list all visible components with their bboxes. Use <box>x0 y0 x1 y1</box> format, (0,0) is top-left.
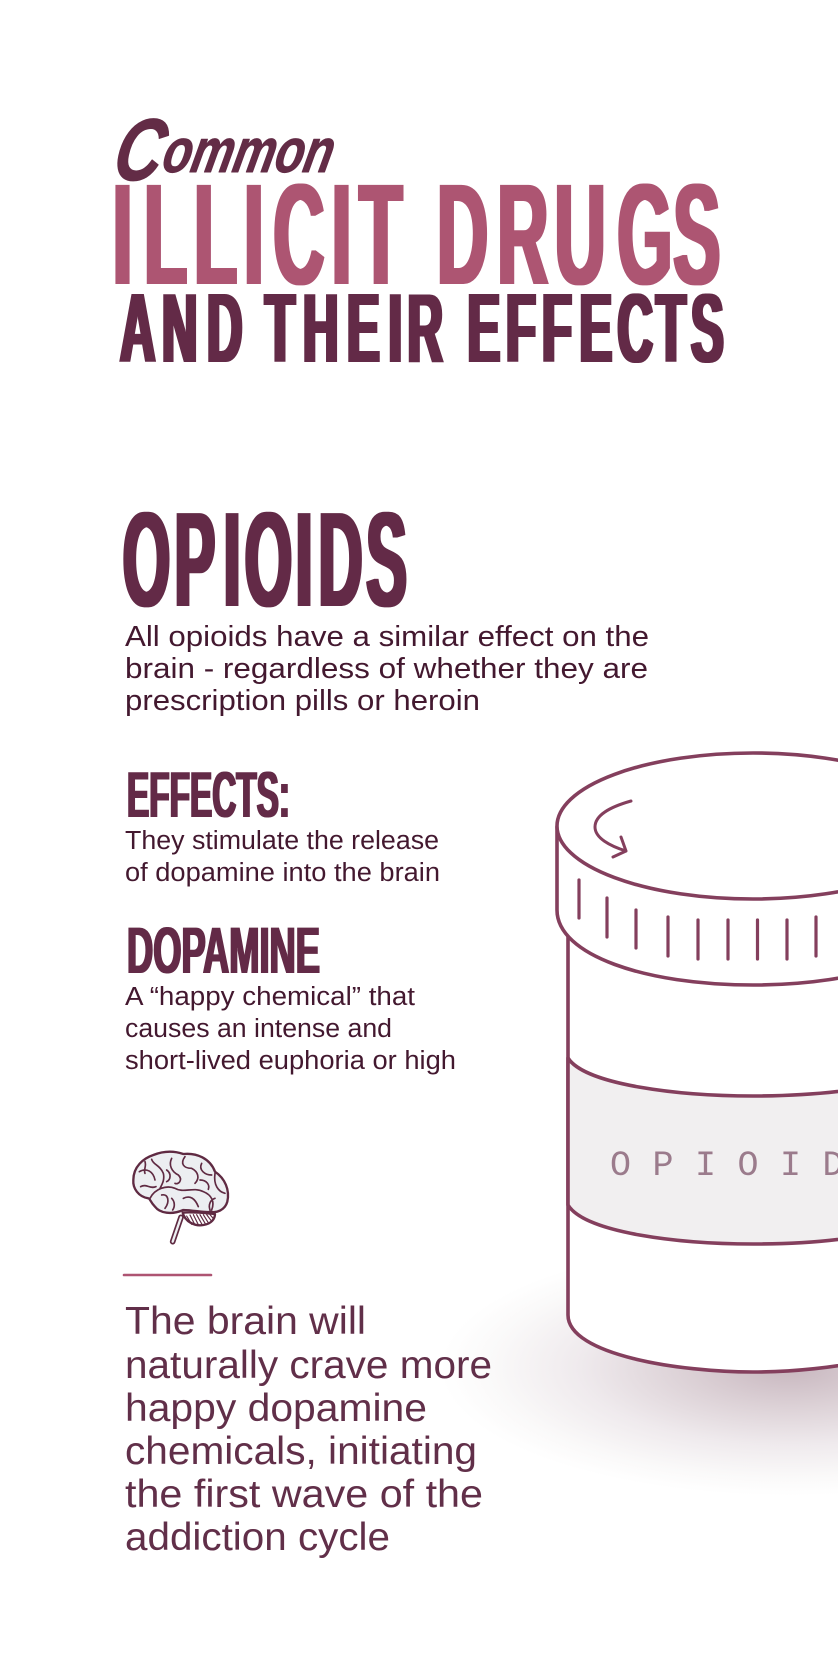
text block: dopamine: short-lived euphoria or high <box>125 1047 456 1075</box>
lid top <box>557 753 838 899</box>
lid ticks <box>579 880 816 959</box>
text block: dopamine: A “happy chemical” that <box>125 983 415 1011</box>
title <box>106 100 724 384</box>
title: and their effects: AND THEIR EFFECTS <box>120 275 724 384</box>
title: illicit drugs: ILLICIT DRUGS <box>113 154 720 316</box>
heading: opioids: OPIOIDS <box>123 485 407 636</box>
heading: effects: EFFECTS: <box>127 758 290 831</box>
bottle shadow <box>440 1240 838 1496</box>
pill bottle <box>557 753 838 1372</box>
text block: craving: The brain will <box>125 1300 366 1343</box>
text block: dopamine: causes an intense and <box>125 1015 392 1043</box>
text block: craving: the first wave of the <box>125 1473 483 1516</box>
text block: effects: of dopamine into the brain <box>125 859 440 887</box>
text block: effects: They stimulate the release <box>125 827 439 855</box>
title: Common: ommon <box>157 117 342 186</box>
text block: craving: happy dopamine <box>125 1387 427 1430</box>
text block: opioids intro: brain - regardless of whether they are <box>125 653 648 685</box>
text block: craving: chemicals, initiating <box>125 1430 477 1473</box>
text block: craving <box>125 1300 492 1559</box>
text block: effects <box>125 827 440 887</box>
title: Common: C <box>106 100 177 199</box>
icon: twist arrow <box>595 801 631 857</box>
icon: brain <box>133 1152 228 1242</box>
divider line <box>124 1274 211 1276</box>
heading: dopamine: DOPAMINE <box>127 913 320 987</box>
text block: opioids intro: prescription pills or heroin <box>125 685 480 717</box>
bottle label <box>568 1058 838 1244</box>
text block: opioids intro <box>125 621 649 717</box>
bottle lid <box>557 827 838 985</box>
text block: craving: addiction cycle <box>125 1516 390 1559</box>
bottle body <box>568 930 838 1372</box>
text block: craving: naturally crave more <box>125 1344 492 1387</box>
text block: opioids intro: All opioids have a similar effect on the <box>125 621 649 653</box>
text block: dopamine <box>125 983 456 1075</box>
